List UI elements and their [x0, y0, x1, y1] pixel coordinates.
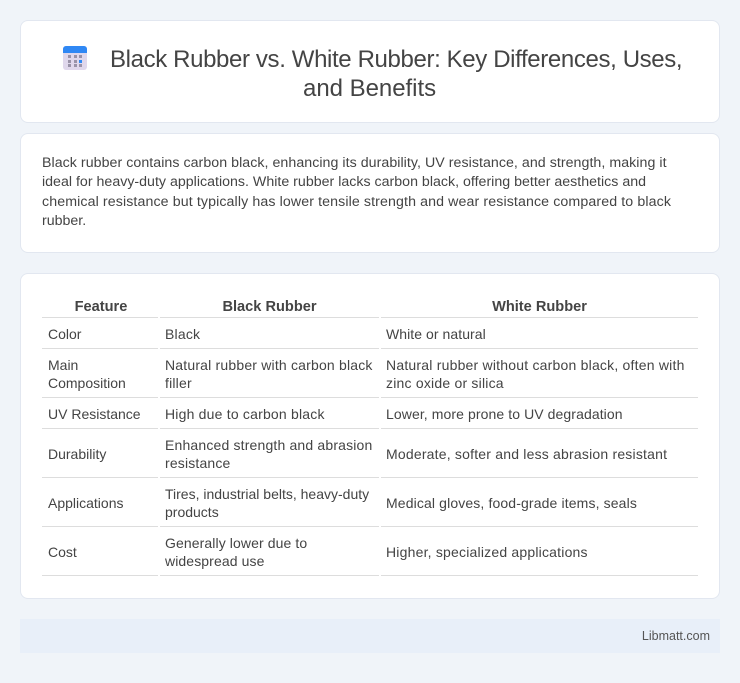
panel: description card [20, 133, 720, 253]
row: Applications: products [165, 504, 219, 520]
row: Applications [48, 486, 637, 520]
text: description: rubber. [42, 213, 86, 229]
row: Color: Black [165, 326, 200, 342]
row: Main Composition: Main [48, 357, 78, 373]
row: Applications: Medical gloves, food-grade items, seals [386, 495, 637, 511]
row: UV Resistance: Lower, more prone to UV degradation [386, 406, 623, 422]
row: Durability: Enhanced strength and abrasion [165, 437, 372, 453]
row: Cost [48, 535, 588, 569]
title: and Benefits [303, 75, 436, 102]
text: description [42, 155, 671, 229]
row: Applications: Tires, industrial belts, heavy-duty [165, 486, 369, 502]
row: Color: White or natural [386, 326, 486, 342]
title: Black Rubber vs. White Rubber: Key Differences, Uses, [110, 46, 682, 73]
comparison table [42, 299, 698, 576]
row: Durability: Durability [48, 446, 106, 462]
row: Cost: Higher, specialized applications [386, 544, 588, 560]
row: Durability: resistance [165, 455, 231, 471]
row: Cost: Cost [48, 544, 77, 560]
footer bar [20, 619, 720, 653]
row: UV Resistance: High due to carbon black [165, 406, 325, 422]
header: White Rubber: White Rubber [492, 299, 587, 315]
row: Applications: Applications [48, 495, 124, 511]
icon: calendar [63, 46, 87, 70]
title [110, 46, 682, 102]
text: description: ideal for heavy-duty applications. White rubber lacks carbon black, offering better aesthetics and [42, 174, 646, 190]
footer text: Libmatt.com [642, 629, 710, 643]
row: Main Composition: filler [165, 375, 192, 391]
row: Durability: Moderate, softer and less abrasion resistant [386, 446, 667, 462]
row: Main Composition: Composition [48, 375, 126, 391]
header: Black Rubber: Black Rubber [222, 299, 317, 315]
row: Main Composition: zinc oxide or silica [386, 375, 504, 391]
panel: comparison table card [20, 273, 720, 599]
text: description: Black rubber contains carbon black, enhancing its durability, UV resistance, and strength, making it [42, 155, 667, 171]
row: Main Composition: Natural rubber with carbon black [165, 357, 373, 373]
header: Feature: Feature [75, 299, 127, 315]
text: description: chemical resistance but typically has lower tensile strength and wear resistance compared to black [42, 194, 671, 210]
row: Main Composition: Natural rubber without carbon black, often with [386, 357, 685, 373]
panel: title card [20, 20, 720, 123]
row: UV Resistance [48, 406, 623, 422]
row: UV Resistance: UV Resistance [48, 406, 141, 422]
row: Color [48, 326, 486, 342]
row: Cost: Generally lower due to [165, 535, 307, 551]
row: Durability [48, 437, 667, 471]
row: Color: Color [48, 326, 81, 342]
row: Cost: widespread use [165, 553, 264, 569]
row: Main Composition [48, 357, 685, 391]
